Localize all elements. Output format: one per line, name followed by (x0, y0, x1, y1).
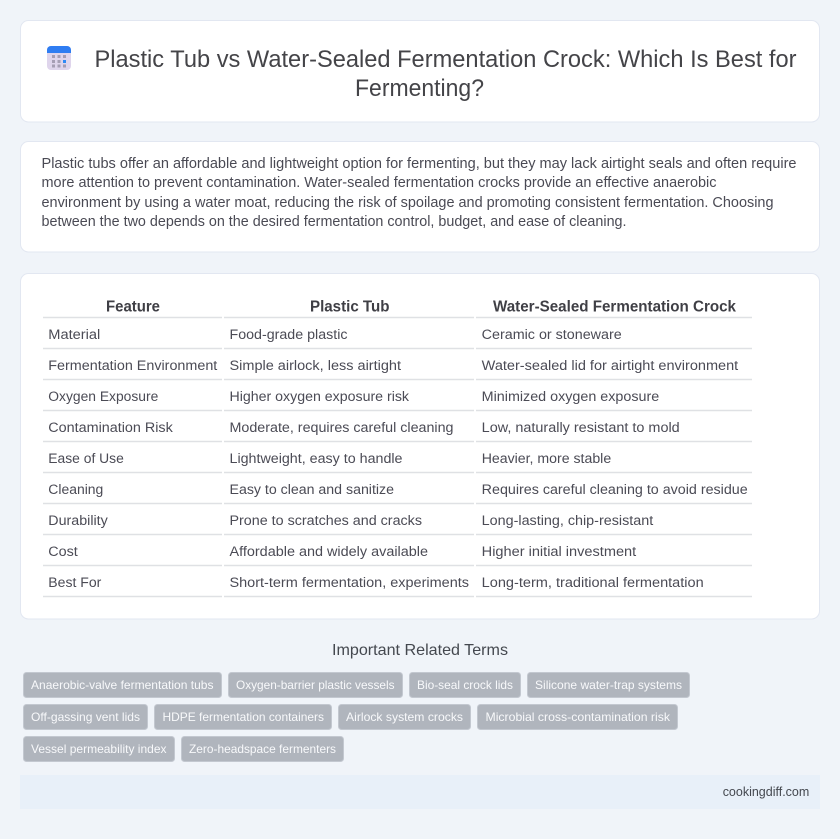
related term tags (24, 672, 690, 762)
title: Plastic Tub vs Water-Sealed Fermentation Crock: Which Is Best for (94, 46, 796, 73)
table row: cleaning: Requires careful cleaning to avoid residue (482, 482, 748, 498)
table row: contamination risk: Low, naturally resistant to mold (482, 420, 680, 436)
table row: material: Ceramic or stoneware (482, 327, 622, 343)
table row: cost: Higher initial investment (482, 544, 636, 560)
table row: fermentation environment: Water-sealed lid for airtight environment (482, 358, 738, 374)
table row: durability: Durability (48, 513, 109, 529)
table row: ease of use: Heavier, more stable (482, 451, 611, 467)
table row: oxygen exposure: Oxygen Exposure (48, 389, 158, 405)
tag (228, 672, 402, 698)
tag: Anaerobic-valve fermentation tubs (31, 678, 214, 692)
tag: Bio-seal crock lids (417, 678, 513, 692)
icon: calendar (47, 46, 71, 70)
table header row (106, 298, 736, 316)
table row: fermentation environment: Simple airlock, less airtight (230, 358, 401, 374)
table row: oxygen exposure: Minimized oxygen exposure (482, 389, 659, 405)
footer source text: cookingdiff.com (723, 784, 809, 799)
table row: oxygen exposure: Higher oxygen exposure risk (230, 389, 410, 405)
title (94, 46, 796, 102)
table row: cost (48, 544, 636, 560)
table row: ease of use: Ease of Use (48, 451, 124, 467)
tag: Vessel permeability index (31, 742, 166, 756)
table row: material (48, 327, 622, 343)
table row: material: Material (48, 327, 100, 343)
tag: Airlock system crocks (346, 710, 463, 724)
table row: durability: Prone to scratches and cracks (230, 513, 422, 529)
table row: cleaning: Easy to clean and sanitize (230, 482, 394, 498)
tag: Silicone water-trap systems (535, 678, 682, 692)
table row: durability: Long-lasting, chip-resistant (482, 513, 653, 529)
text block: introduction paragraph: environment by using a water moat, reducing the risk of spoilage and promoting consistent fermentation. Choosing (42, 195, 774, 211)
text block: introduction paragraph (42, 156, 796, 230)
table row: cost: Affordable and widely available (230, 544, 428, 560)
tag (478, 704, 678, 730)
text block: introduction paragraph: Plastic tubs offer an affordable and lightweight option for fermenting, but they may lack airtight seals and often require (42, 156, 796, 172)
tag (154, 704, 332, 730)
table header row: Feature (106, 298, 160, 316)
table row: best for (48, 575, 704, 591)
table header row: Water-Sealed Fermentation Crock (493, 298, 736, 316)
table row: oxygen exposure (48, 389, 659, 405)
table row: cleaning (48, 482, 748, 498)
heading: important related terms: Important Related Terms (332, 642, 508, 659)
table row: contamination risk (48, 420, 680, 436)
table row: best for: Short-term fermentation, experiments (230, 575, 469, 591)
table row: cleaning: Cleaning (48, 482, 103, 498)
tag (410, 672, 520, 698)
tag: Off-gassing vent lids (31, 710, 140, 724)
text block: introduction paragraph: between the two depends on the desired fermentation control, budget, and ease of cleaning. (42, 214, 626, 230)
panel: comparison table (20, 274, 820, 619)
tag (528, 672, 690, 698)
table row: best for: Best For (48, 575, 102, 591)
panel: title header (20, 20, 820, 122)
tag: Microbial cross-contamination risk (486, 710, 671, 724)
tag (182, 736, 344, 762)
title: Fermenting? (355, 75, 484, 102)
table row: durability (48, 513, 653, 529)
table row: ease of use (48, 451, 611, 467)
footer (20, 775, 820, 809)
tag (24, 672, 222, 698)
table row: cost: Cost (48, 544, 78, 560)
tag: Zero-headspace fermenters (189, 742, 336, 756)
table header row: Plastic Tub (310, 298, 390, 316)
table row: fermentation environment (48, 358, 738, 374)
table row: material: Food-grade plastic (230, 327, 348, 343)
tag: HDPE fermentation containers (162, 710, 324, 724)
table row: best for: Long-term, traditional fermentation (482, 575, 704, 591)
text block: introduction paragraph: more attention to prevent contamination. Water-sealed fermentation crocks provide an effective anaerobic (42, 175, 716, 191)
table row: fermentation environment: Fermentation Environment (48, 358, 217, 374)
tag (338, 704, 470, 730)
tag (24, 704, 148, 730)
tag (24, 736, 174, 762)
panel: introduction (20, 142, 820, 252)
table row: contamination risk: Contamination Risk (48, 420, 174, 436)
tag: Oxygen-barrier plastic vessels (236, 678, 394, 692)
table row: contamination risk: Moderate, requires careful cleaning (230, 420, 454, 436)
table row: ease of use: Lightweight, easy to handle (230, 451, 403, 467)
